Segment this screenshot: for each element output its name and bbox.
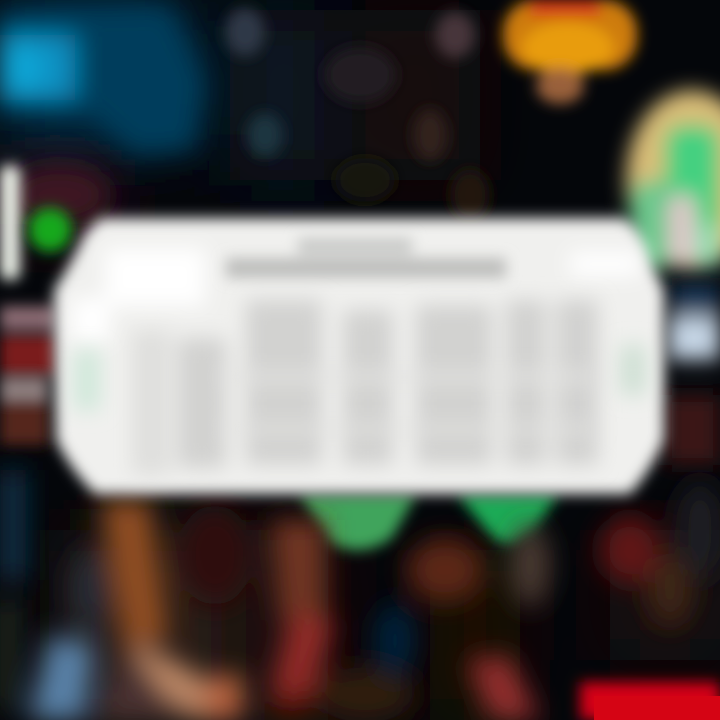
maroon haze, left <box>10 165 110 225</box>
globe, right <box>626 90 720 270</box>
red banner, bottom right <box>580 682 720 720</box>
card green tints at edges <box>74 345 646 410</box>
blue stage light, top left <box>0 5 205 155</box>
table row highlights <box>225 372 595 433</box>
dim ceiling lights <box>225 8 490 221</box>
orange light, top right <box>503 0 637 104</box>
table title <box>226 238 506 278</box>
pale blue band at right edge <box>665 285 720 465</box>
green pennants below the panel <box>300 495 558 550</box>
card bright top corners <box>72 248 640 342</box>
white badge at left edge <box>0 165 20 280</box>
panel: white table card <box>54 218 664 494</box>
crowd silhouettes, bottom <box>0 470 720 720</box>
table columns <box>132 300 598 475</box>
green dot at left <box>28 208 72 252</box>
striped band at left edge <box>0 306 56 445</box>
